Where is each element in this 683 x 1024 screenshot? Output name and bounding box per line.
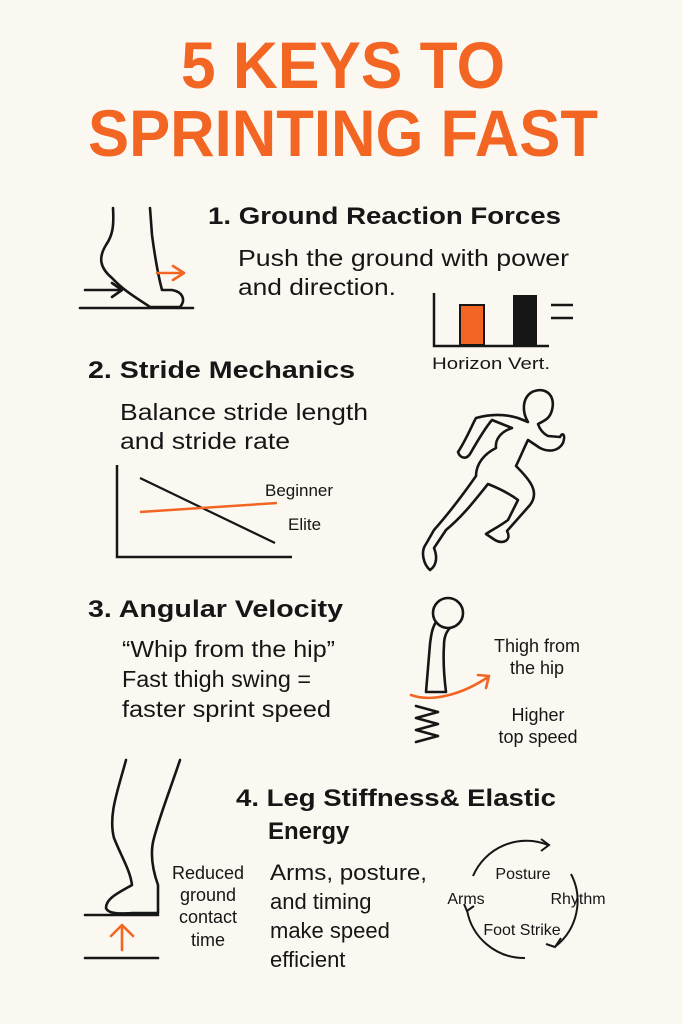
text block 4 [270, 860, 427, 972]
callout: reduced ground contact time [172, 863, 244, 950]
icon: foot pushing ground [80, 208, 193, 308]
cycle diagram [447, 839, 606, 958]
line chart [117, 465, 333, 557]
cycle diagram: Arms [447, 891, 485, 908]
icon: spring figure [411, 598, 489, 742]
text block 4: efficient [270, 947, 345, 972]
text block 4: make speed [270, 918, 390, 943]
icon: runner [423, 390, 564, 570]
title: 5 KEYS TO [181, 28, 505, 102]
text block 2: Balance stride length [120, 399, 368, 425]
text block 3: “Whip from the hip” [122, 636, 335, 662]
title [88, 28, 598, 170]
callout: higher top speed [498, 705, 578, 747]
callout: higher top speed: Higher [511, 705, 565, 725]
callout: reduced ground contact time: ground [180, 885, 236, 905]
cycle diagram: Posture [495, 866, 551, 883]
heading 4: Energy [268, 818, 350, 845]
text block 3: faster sprint speed [122, 696, 331, 722]
heading 4 [236, 785, 556, 845]
text block 3 [122, 636, 335, 722]
bar chart: Horizon Vert. [432, 354, 550, 373]
callout: thigh from the hip [494, 636, 580, 678]
heading 4: 4. Leg Stiffness& Elastic [236, 785, 556, 812]
callout: reduced ground contact time: contact [179, 907, 237, 927]
icon: leg with ground contact [85, 760, 180, 958]
text block 4: Arms, posture, [270, 860, 427, 885]
callout: thigh from the hip: Thigh from [494, 636, 580, 656]
text block 2 [120, 399, 368, 454]
callout: reduced ground contact time: Reduced [172, 863, 244, 883]
callout: reduced ground contact time: time [191, 930, 225, 950]
cycle diagram: Foot Strike [483, 922, 561, 939]
text block 1: and direction. [238, 274, 396, 300]
line chart: Beginner [265, 481, 333, 500]
heading 1: 1. Ground Reaction Forces [208, 203, 561, 230]
text block 2: and stride rate [120, 428, 290, 454]
heading 3: 3. Angular Velocity [88, 596, 344, 623]
text block 1: Push the ground with power [238, 245, 569, 271]
line chart: Elite [288, 515, 321, 534]
text block 4: and timing [270, 889, 372, 914]
title: SPRINTING FAST [88, 96, 598, 170]
cycle diagram: Rhythm [550, 891, 606, 908]
heading 2: 2. Stride Mechanics [88, 357, 355, 384]
callout: higher top speed: top speed [498, 727, 578, 747]
callout: thigh from the hip: the hip [510, 658, 564, 678]
text block 1 [238, 245, 569, 300]
text block 3: Fast thigh swing = [122, 666, 311, 692]
bar chart [432, 293, 573, 373]
